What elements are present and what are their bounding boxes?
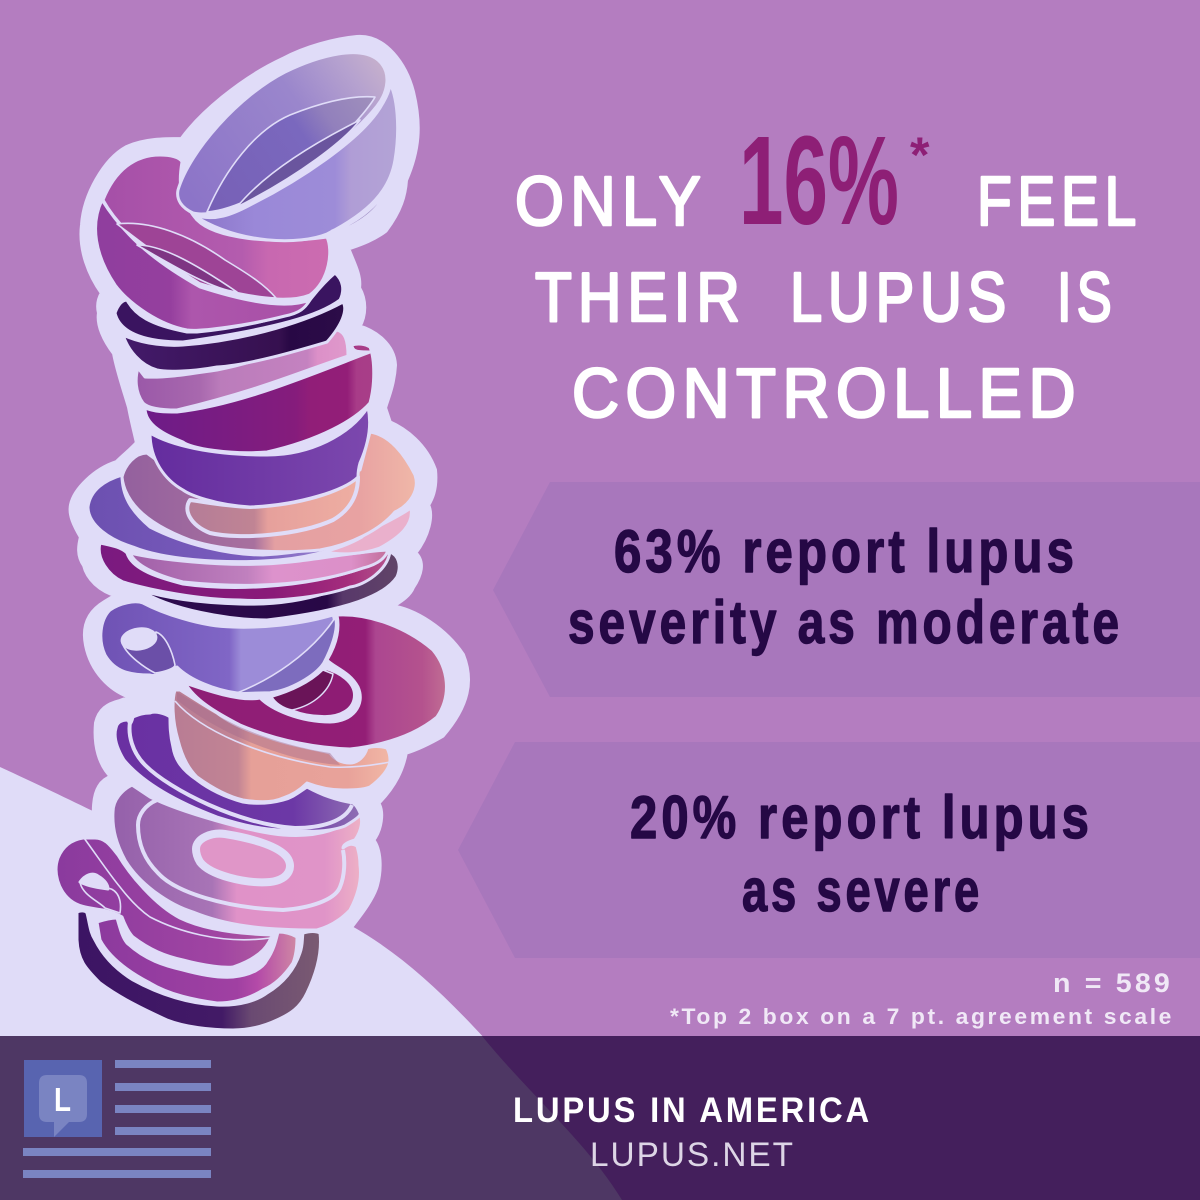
title — [515, 110, 1142, 432]
flag canton — [24, 1060, 102, 1137]
pink mauve bowl — [136, 330, 348, 410]
footer title: LUPUS IN AMERICA — [513, 1091, 872, 1130]
title line 1: only: ONLY — [515, 162, 707, 240]
arrow panel — [493, 482, 1200, 697]
title line 3: CONTROLLED — [572, 354, 1082, 432]
bottom saucer — [97, 918, 297, 1003]
magenta plate — [99, 543, 390, 600]
illustration: teetering stack of cups, bowls and saucers — [45, 38, 467, 1037]
periwinkle plate — [88, 475, 362, 562]
callout: severe — [458, 742, 1200, 958]
callout text line 1: 63% report lupus — [614, 518, 1078, 585]
arrow panel — [458, 742, 1200, 958]
callout text line 1: 20% report lupus — [630, 784, 1093, 851]
callout text line 2: as severe — [742, 857, 983, 924]
speech bubble — [39, 1075, 87, 1137]
lavender hill — [0, 767, 486, 1040]
pale pink plate edge — [325, 508, 411, 554]
dark bowl lower — [123, 302, 345, 371]
peach saucer — [122, 432, 416, 552]
dark plate — [140, 552, 399, 620]
logo letter: L — [54, 1081, 71, 1118]
pink plate — [130, 550, 388, 585]
footer url: LUPUS.NET — [590, 1136, 795, 1174]
title stat: 16%: 16% — [739, 110, 899, 251]
footnote: *Top 2 box on a 7 pt. agreement scale — [670, 1004, 1174, 1029]
flag stripes — [23, 1060, 211, 1178]
bottom cup with handle — [56, 838, 272, 967]
purple saucer — [115, 712, 360, 831]
top lavender bowl — [178, 53, 398, 241]
dark bowl upper — [115, 273, 343, 342]
footer lighter hill overlay — [0, 1036, 622, 1200]
lavender teacup — [101, 602, 336, 693]
peach bowl — [173, 690, 390, 802]
title line 2: their: THEIR — [535, 258, 746, 336]
magenta bowl — [145, 344, 374, 453]
magenta tilted bowl — [96, 155, 330, 330]
title line 1: feel: FEEL — [977, 162, 1142, 240]
footer band — [0, 1036, 1200, 1200]
callout: moderate severity — [493, 482, 1200, 697]
pink saucer — [113, 785, 362, 930]
purple bowl — [150, 407, 370, 507]
asterisk: * — [910, 127, 930, 183]
bottom dark saucer — [77, 911, 320, 1030]
title line 2: is: IS — [1057, 258, 1117, 336]
title line 2: lupus: LUPUS — [790, 258, 1012, 336]
sticker outline — [45, 38, 467, 1037]
sample size note: n = 589 — [1053, 968, 1173, 998]
logo: lupus in america flag — [23, 1060, 211, 1178]
magenta saucer — [185, 615, 446, 749]
